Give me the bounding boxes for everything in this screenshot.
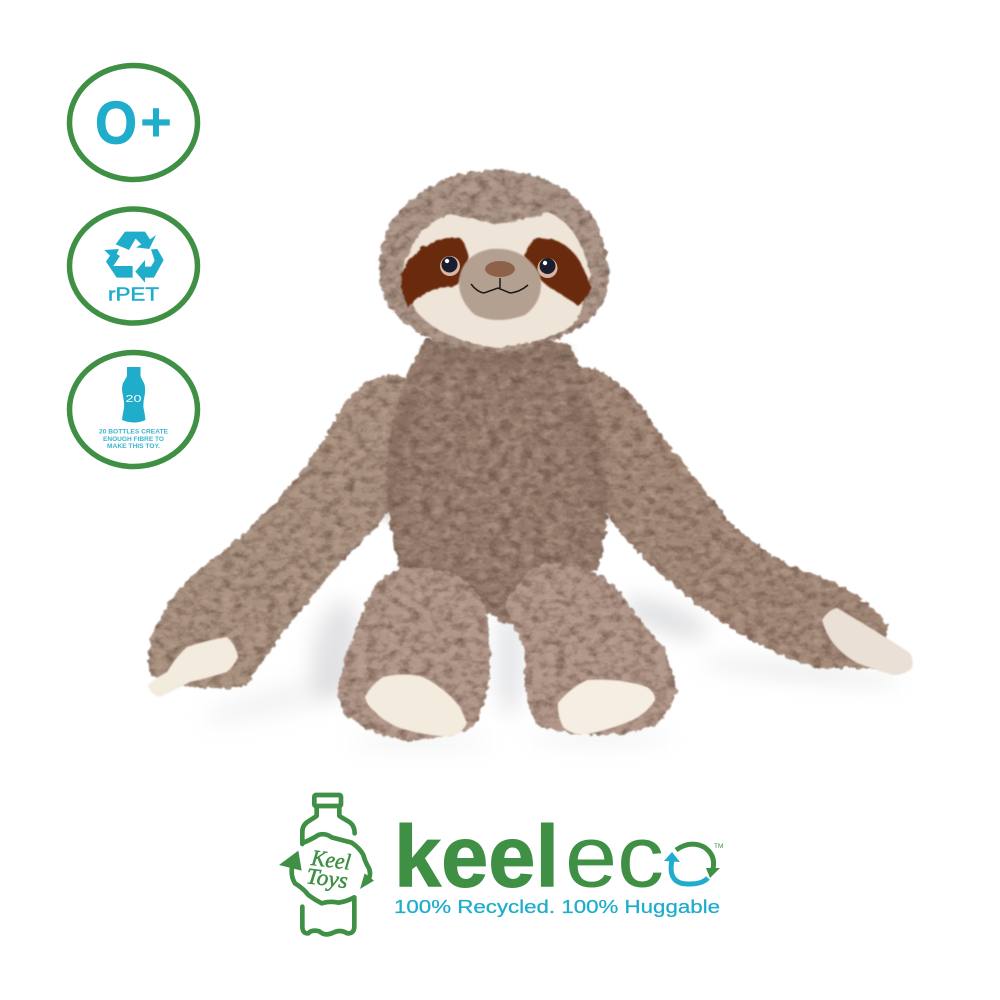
logo: Keel Toys wordmark: Keel <box>309 845 352 875</box>
text: bottles note: MAKE THIS TOY. <box>107 443 160 450</box>
badge: 20 bottles <box>70 352 198 466</box>
logo: ec wordmark: ec <box>565 808 664 906</box>
logo: recycling o <box>664 844 720 884</box>
logo: bottle mark <box>279 795 374 934</box>
icon: bottle <box>122 367 146 422</box>
logo: trademark: TM <box>714 843 723 850</box>
left leg <box>338 568 490 740</box>
floor shadows <box>200 589 900 746</box>
face: left eye mask <box>401 237 468 308</box>
face: right eye <box>538 258 558 278</box>
badge: age 0+ <box>70 66 198 180</box>
body <box>387 334 607 625</box>
badge: age 0+: O <box>95 90 137 156</box>
face: left eye <box>440 256 460 276</box>
fur seams and shading <box>388 352 606 612</box>
right foot pad <box>558 680 655 735</box>
icon: recycling arrows <box>104 232 164 283</box>
logo: keel wordmark: keel <box>394 808 559 906</box>
left foot pad <box>365 674 467 737</box>
right leg <box>506 563 677 735</box>
text: bottles note: 20 BOTTLES CREATE <box>99 428 169 436</box>
badge: rPET recycling: rPET <box>108 284 159 304</box>
face: right eye mask <box>524 238 591 306</box>
logo: Keel Toys wordmark <box>305 845 352 893</box>
logo: tagline: 100% Recycled. 100% Huggable <box>394 897 720 917</box>
badge: 20 bottles: 20 <box>126 393 142 405</box>
left hand pad <box>148 637 238 697</box>
right arm <box>565 365 888 668</box>
logo: keeleco <box>279 795 723 934</box>
face: cream fur <box>403 212 590 348</box>
right hand pad <box>822 608 913 675</box>
face: mouth <box>471 278 528 293</box>
head <box>379 170 608 352</box>
badge: age 0+: + <box>140 90 172 153</box>
sloth plush toy <box>148 170 913 740</box>
badge: rPET recycling <box>70 209 198 323</box>
text: bottles note: ENOUGH FIBRE TO <box>103 436 164 443</box>
face: nose <box>485 261 515 277</box>
text: bottles note <box>99 428 169 450</box>
left arm <box>149 375 420 688</box>
logo: Keel Toys wordmark: Toys <box>305 863 349 893</box>
face: muzzle <box>459 249 541 320</box>
